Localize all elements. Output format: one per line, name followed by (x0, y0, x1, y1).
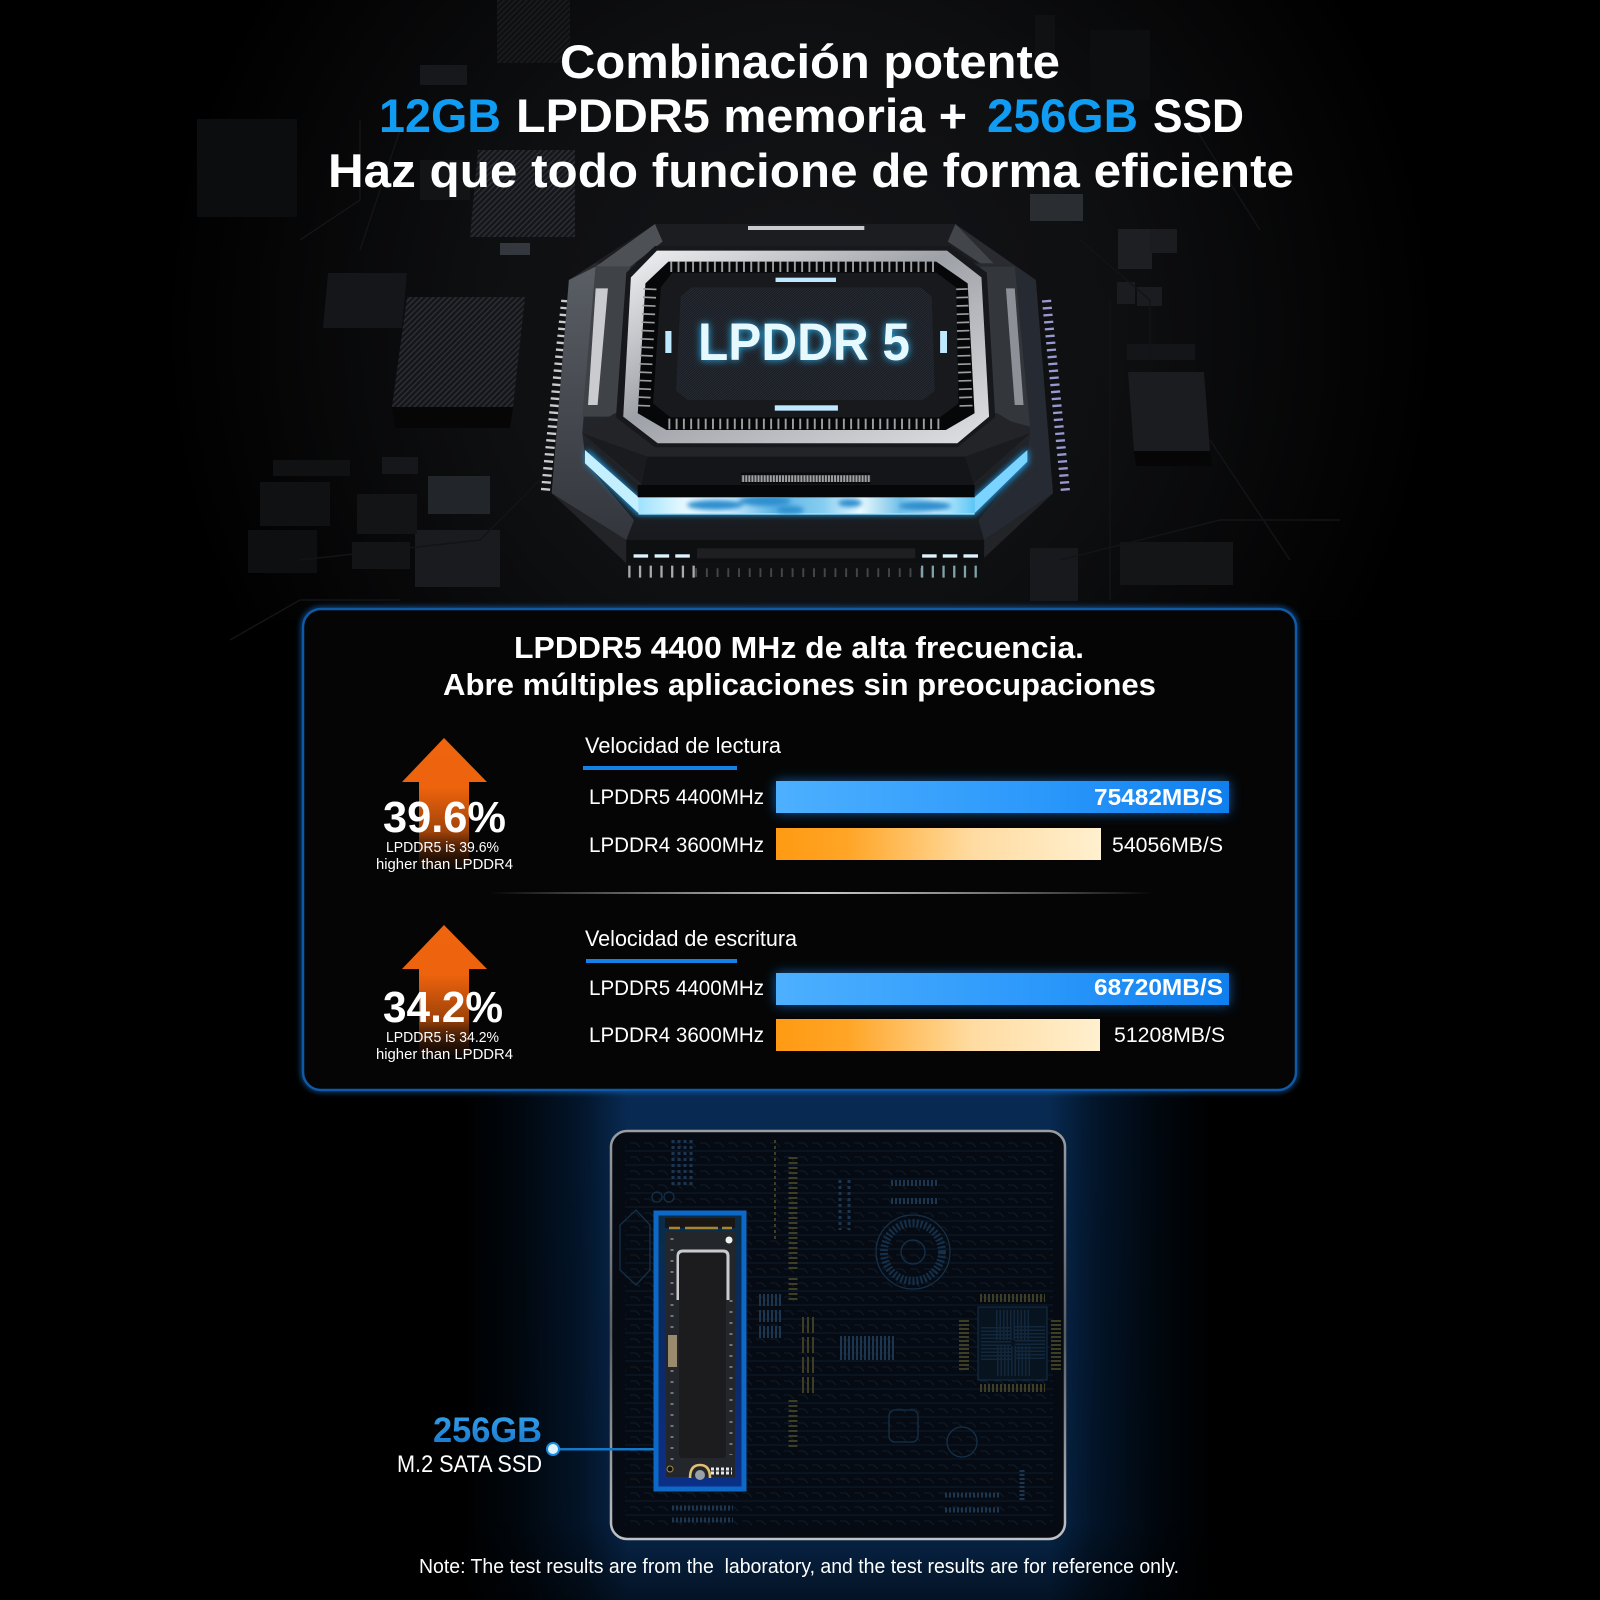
read speed increase callout (376, 738, 513, 873)
write speed increase callout: LPDDR5 is 34.2% (386, 1030, 499, 1046)
SSD label with leader line (397, 1411, 654, 1478)
footnote: Note: The test results are from the laboratory, and the test results are for reference only. (419, 1556, 1179, 1578)
read speed bar chart: LPDDR4 3600MHz (589, 833, 764, 857)
chip illustration: LPDDR 5: LPDDR 5 (698, 313, 910, 372)
read speed bar chart: LPDDR5 4400MHz (589, 785, 764, 809)
read speed increase callout: higher than LPDDR4 (376, 857, 513, 873)
write speed increase callout: higher than LPDDR4 (376, 1047, 513, 1063)
title: LPDDR5 memoria + (516, 89, 967, 142)
SSD label with leader line: M.2 SATA SSD (397, 1451, 542, 1478)
read speed increase callout: 39.6% (383, 793, 506, 842)
write speed bar chart: Velocidad de escritura (585, 926, 798, 951)
read speed bar chart (583, 733, 1229, 860)
write speed bar chart: LPDDR5 4400MHz (589, 976, 764, 1000)
read speed bar chart: 75482MB/S (1094, 784, 1223, 810)
write speed increase callout: 34.2% (383, 983, 503, 1032)
title: SSD (1153, 89, 1244, 142)
write speed bar chart: 68720MB/S (1094, 974, 1223, 1000)
blue halo behind device (463, 1088, 1213, 1600)
read speed increase callout: LPDDR5 is 39.6% (386, 840, 499, 856)
write speed increase callout (376, 925, 513, 1063)
title: Combinación potente (560, 35, 1060, 88)
device with circuit board (611, 1131, 1065, 1539)
title (328, 35, 1294, 197)
SSD label with leader line: 256GB (433, 1411, 542, 1450)
chip illustration: LPDDR 5 (545, 224, 1066, 573)
title: Haz que todo funcione de forma eficiente (328, 144, 1294, 197)
write speed bar chart (585, 926, 1229, 1051)
write speed bar chart: LPDDR4 3600MHz (589, 1023, 764, 1047)
panel heading: LPDDR5 4400 MHz de alta frecuencia. (514, 630, 1084, 665)
panel: LPDDR5 frequency comparison (303, 609, 1296, 1090)
title: 12GB (379, 89, 501, 142)
read speed bar chart: 54056MB/S (1112, 833, 1223, 857)
read speed bar chart: Velocidad de lectura (585, 733, 782, 758)
write speed bar chart: 51208MB/S (1114, 1023, 1225, 1047)
title: 256GB (987, 89, 1138, 142)
SSD module highlighted (656, 1213, 744, 1489)
panel heading (443, 630, 1156, 702)
panel heading: Abre múltiples aplicaciones sin preocupaciones (443, 667, 1156, 702)
